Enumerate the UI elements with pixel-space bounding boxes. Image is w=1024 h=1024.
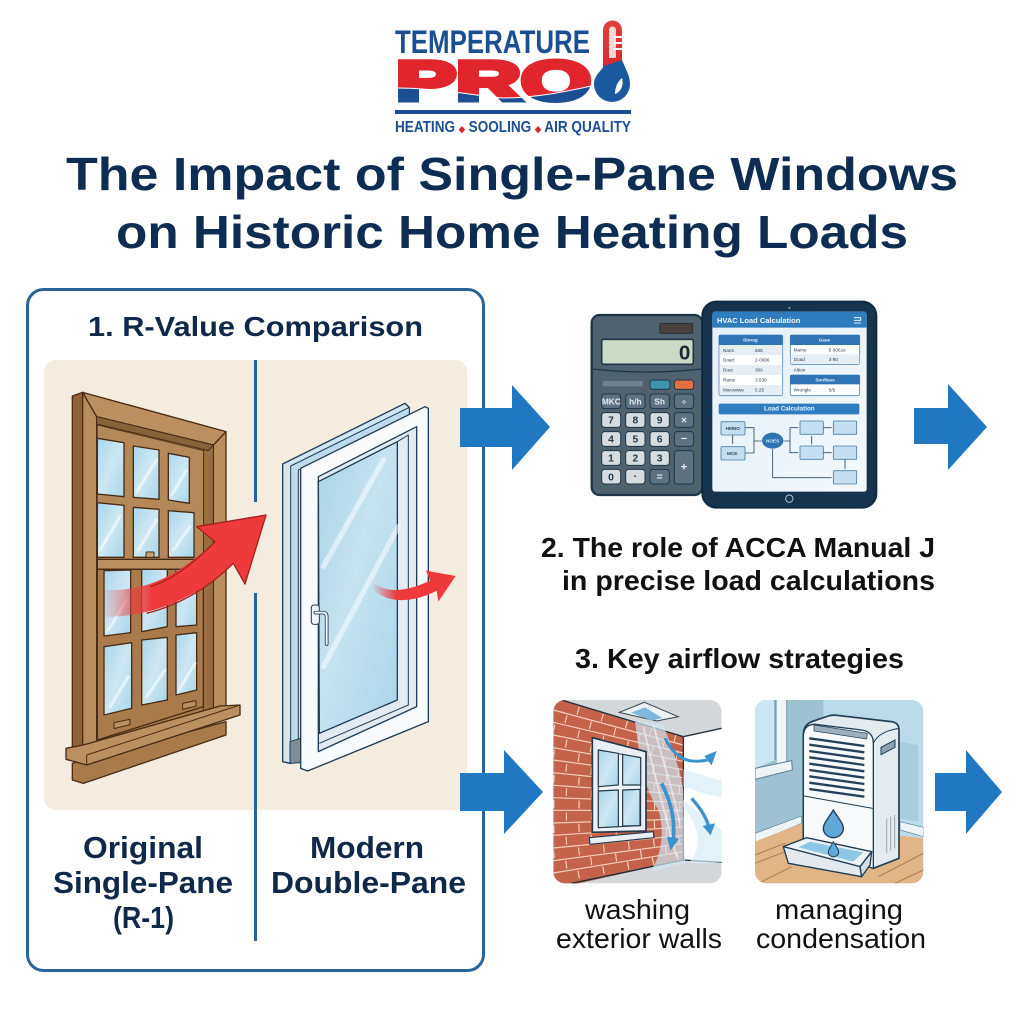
illustration: calculator: × [681,415,687,426]
label: original single-pane: (R-1) [113,900,174,935]
tablet flow diagram: HMNO [726,426,740,431]
logo wordmark: Pro: PRO [396,49,591,112]
arrow: panel 1 to calculation [460,385,550,470]
section 2 heading [541,532,935,596]
section 2 heading: in precise load calculations [562,565,935,596]
water drop icon [823,810,843,838]
condensate tray [783,838,872,877]
calculator keys [602,394,694,484]
illustration: modern double-pane window [283,403,428,771]
tablet table: settings: Wrongle [794,388,811,393]
caption: washing exterior walls [556,894,722,954]
illustration: calculator: 7 [608,416,614,427]
tablet table: inputs: 2·0006 [755,358,770,363]
logo: Temperature Pro [395,21,632,136]
tablet table: base: Mame [794,348,807,353]
arrow: airflow onward [935,750,1002,834]
arrow: panel 1 to airflow [460,750,543,834]
illustration: calculator [592,315,702,495]
illustration: calculator: 6 [657,435,663,446]
tablet table: inputs: 300 [755,368,763,373]
tablet table: inputs: 3.530 [755,377,767,382]
caption: washing exterior walls: washing [584,894,690,925]
illustration: calculator: + [681,462,688,474]
panel heading: 1. R-Value Comparison [88,311,423,342]
illustration: calculator: ÷ [682,397,687,407]
illustration: tablet with HVAC load calculation: HVAC Load Calculation [717,316,801,325]
illustration: tablet with HVAC load calculation: Load Calculation [764,407,815,413]
tablet table: inputs: Doart [723,358,735,363]
tablet table: inputs: Storag [743,338,758,343]
illustration: calculator: Sh [654,396,665,406]
illustration: tablet with HVAC load calculation [702,302,876,508]
caption: managing condensation: condensation [756,923,926,954]
tablet table: inputs: Marowiwe [723,387,744,392]
arrow: calculation onward [914,384,987,470]
logo tagline: HEATING ◆ SOOLING ◆ AIR QUALITY [395,119,632,136]
tablet table: inputs: 605 [755,348,763,353]
tablet table: base: 5·0061e [829,348,846,353]
tablet flow diagram: NOES [766,438,779,443]
illustration: calculator: 1 [608,454,614,465]
tablet table: settings [790,375,860,396]
tablet table: base: Altion [794,368,806,373]
illustration background [44,360,467,810]
tablet table: inputs: Dour [723,368,734,373]
tablet flow diagram: MCE [727,451,737,456]
illustration: calculator: 3 [657,454,663,465]
tablet table: settings: Sonfiess [815,377,835,382]
illustration: calculator: 2 [632,454,638,465]
illustration: managing condensation with dehumidifier [755,700,923,883]
tablet table: base: Gase [819,338,830,343]
label: original single-pane: Single-Pane [53,865,233,900]
illustration: calculator: 9 [657,416,663,427]
arrow: large heat loss through single pane [105,515,266,617]
title [66,148,958,258]
dehumidifier body [803,715,899,868]
caption: managing condensation [756,894,926,954]
tablet table: base [790,335,860,373]
tablet table: settings: 5/9 [829,388,836,393]
arrow: small heat loss through double pane [373,571,456,602]
logo icon: thermometer [594,21,630,102]
panel: R-value comparison [28,290,484,970]
section 2 heading: 2. The role of ACCA Manual J [541,532,935,563]
section 3 heading: 3. Key airflow strategies [575,643,904,674]
arrow outline: large heat arrow head [147,515,266,613]
illustration: washing exterior walls [553,697,722,887]
logo wordmark: Temperature: TEMPERATURE [395,24,590,60]
illustration: original single-pane wood window [66,392,240,783]
tablet table: inputs: 5.25 [755,387,764,392]
tablet flow diagram [721,421,857,484]
illustration: calculator: 8 [632,416,638,427]
tablet table: inputs: Rante [723,377,736,382]
label: modern double-pane [271,830,466,900]
tablet header [712,312,867,328]
title: The Impact of Single-Pane Windows [66,148,958,200]
tablet table: inputs: Nans [723,348,735,353]
label: original single-pane: Original [83,830,203,865]
illustration: calculator: MKC [602,396,621,406]
label: modern double-pane: Modern [310,830,424,865]
calculator display reading: 0 [679,342,690,365]
illustration: calculator: = [657,472,663,483]
illustration: calculator: − [681,433,687,445]
tablet table: base: 3·90 [829,357,838,362]
illustration: calculator: 0 [608,472,614,483]
tablet table: inputs [719,335,783,396]
label: original single-pane [53,830,233,935]
illustration: calculator: · [634,471,637,482]
label: modern double-pane: Double-Pane [271,865,466,900]
tablet table: base: Doad [794,357,805,362]
illustration: calculator: 4 [608,435,614,446]
title: on Historic Home Heating Loads [116,206,908,258]
illustration: calculator: 5 [632,435,638,446]
caption: washing exterior walls: exterior walls [556,923,722,954]
tablet section bar: load calculation [719,404,859,414]
caption: managing condensation: managing [775,894,903,925]
illustration: calculator: h/h [629,396,642,406]
